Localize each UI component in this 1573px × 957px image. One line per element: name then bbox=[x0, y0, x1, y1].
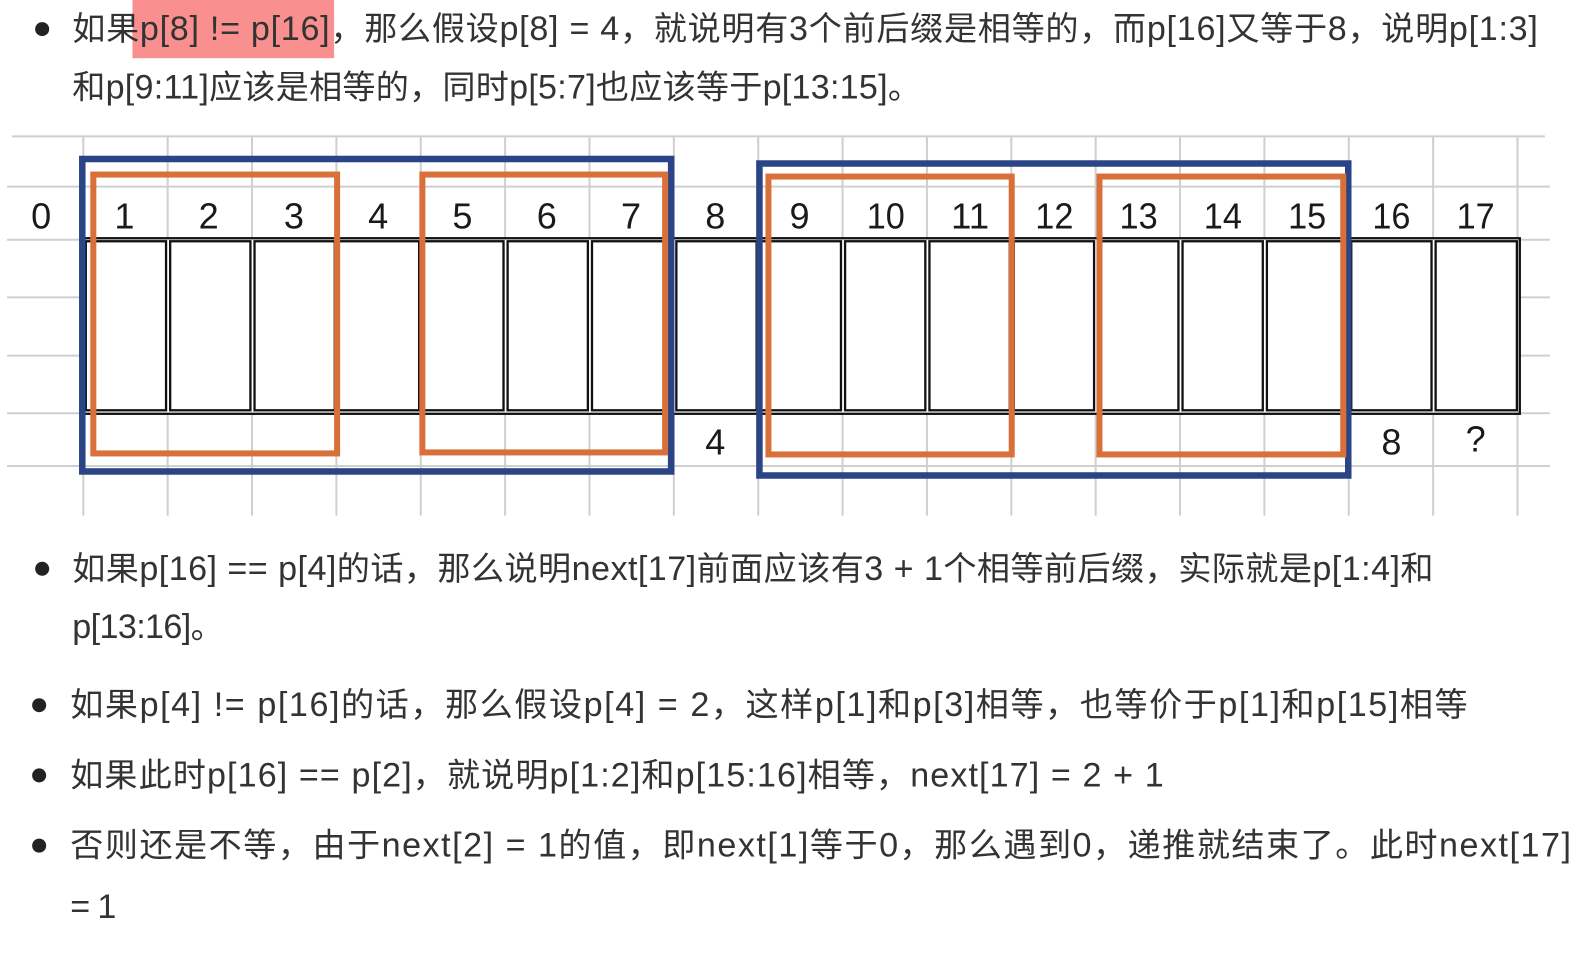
text block: case p[16] == p[4] bbox=[35, 550, 1434, 646]
index labels 0 to 17: 12 bbox=[1035, 196, 1073, 237]
index labels 0 to 17: 17 bbox=[1457, 196, 1495, 237]
index labels 0 to 17: 11 bbox=[951, 196, 989, 237]
text block: case p[16] == p[4]: 如果p[16] == p[4]的话，那么说明next[17]前面应该有3 + 1个相等前后缀，实际就是p[1:4]和 bbox=[72, 550, 1434, 588]
orange box: p[5:7] bbox=[422, 175, 665, 452]
index labels 0 to 17: 1 bbox=[114, 196, 134, 237]
spreadsheet grid bbox=[7, 136, 1550, 516]
index labels 0 to 17: 4 bbox=[368, 196, 388, 237]
text block: otherwise case: 否则还是不等，由于next[2] = 1的值，即next[1]等于0，那么遇到0，递推就结束了。此时next[17] bbox=[70, 827, 1571, 865]
index labels 0 to 17: 6 bbox=[537, 196, 557, 237]
text block: case p[4] != p[16]: 如果p[4] != p[16]的话，那么假设p[4] = 2，这样p[1]和p[3]相等，也等价于p[1]和p[15]相等 bbox=[70, 686, 1468, 724]
blue box: p[1:7] bbox=[82, 159, 671, 471]
blue box: p[9:15] bbox=[759, 164, 1348, 475]
bullet bbox=[35, 22, 49, 36]
line 2: 和p[9:11]应该是相等的，同时p[5:7]也应该等于p[13:15]。 bbox=[72, 68, 921, 106]
index labels 0 to 17 bbox=[31, 196, 1495, 237]
index labels 0 to 17: 2 bbox=[199, 196, 219, 237]
index labels 0 to 17: 15 bbox=[1288, 196, 1326, 237]
text block: otherwise case: = 1 bbox=[70, 888, 116, 926]
text block: case p[8] != p[16] bbox=[35, 0, 1538, 106]
bullet bbox=[32, 698, 46, 712]
next values below the table: 4 bbox=[705, 421, 725, 462]
orange box: p[13:15] bbox=[1099, 177, 1343, 454]
index labels 0 to 17: 16 bbox=[1372, 196, 1410, 237]
highlight: p[8] != p[16] bbox=[132, 0, 334, 58]
index labels 0 to 17: 5 bbox=[452, 196, 473, 237]
orange box: p[9:11] bbox=[768, 177, 1012, 454]
index labels 0 to 17: 0 bbox=[31, 196, 51, 237]
text block: case p[16] == p[2]: 如果此时p[16] == p[2]，就说明p[1:2]和p[15:16]相等，next[17] = 2 + 1 bbox=[70, 756, 1164, 794]
index labels 0 to 17: 13 bbox=[1120, 196, 1158, 237]
bullet bbox=[35, 562, 49, 576]
diagram: array with prefix and suffix boxes bbox=[7, 136, 1550, 516]
index labels 0 to 17: 9 bbox=[789, 196, 810, 237]
next values below the table: 8 bbox=[1381, 421, 1401, 462]
line 1: 如果p[8] != p[16]，那么假设p[8] = 4，就说明有3个前后缀是相等的，而p[16]又等于8，说明p[1:3] bbox=[72, 10, 1538, 48]
orange box: p[1:3] bbox=[93, 175, 337, 453]
index labels 0 to 17: 10 bbox=[867, 196, 905, 237]
next values below the table: ? bbox=[1466, 418, 1486, 459]
bullet bbox=[32, 839, 46, 853]
index labels 0 to 17: 3 bbox=[284, 196, 304, 237]
text block: case p[16] == p[4]: p[13:16]。 bbox=[72, 608, 224, 646]
text block: otherwise case bbox=[32, 827, 1571, 926]
next values below the table bbox=[705, 418, 1486, 462]
index labels 0 to 17: 7 bbox=[621, 196, 641, 237]
bullet bbox=[32, 768, 46, 782]
array table bbox=[84, 238, 1520, 414]
index labels 0 to 17: 8 bbox=[705, 196, 725, 237]
index labels 0 to 17: 14 bbox=[1204, 196, 1242, 237]
